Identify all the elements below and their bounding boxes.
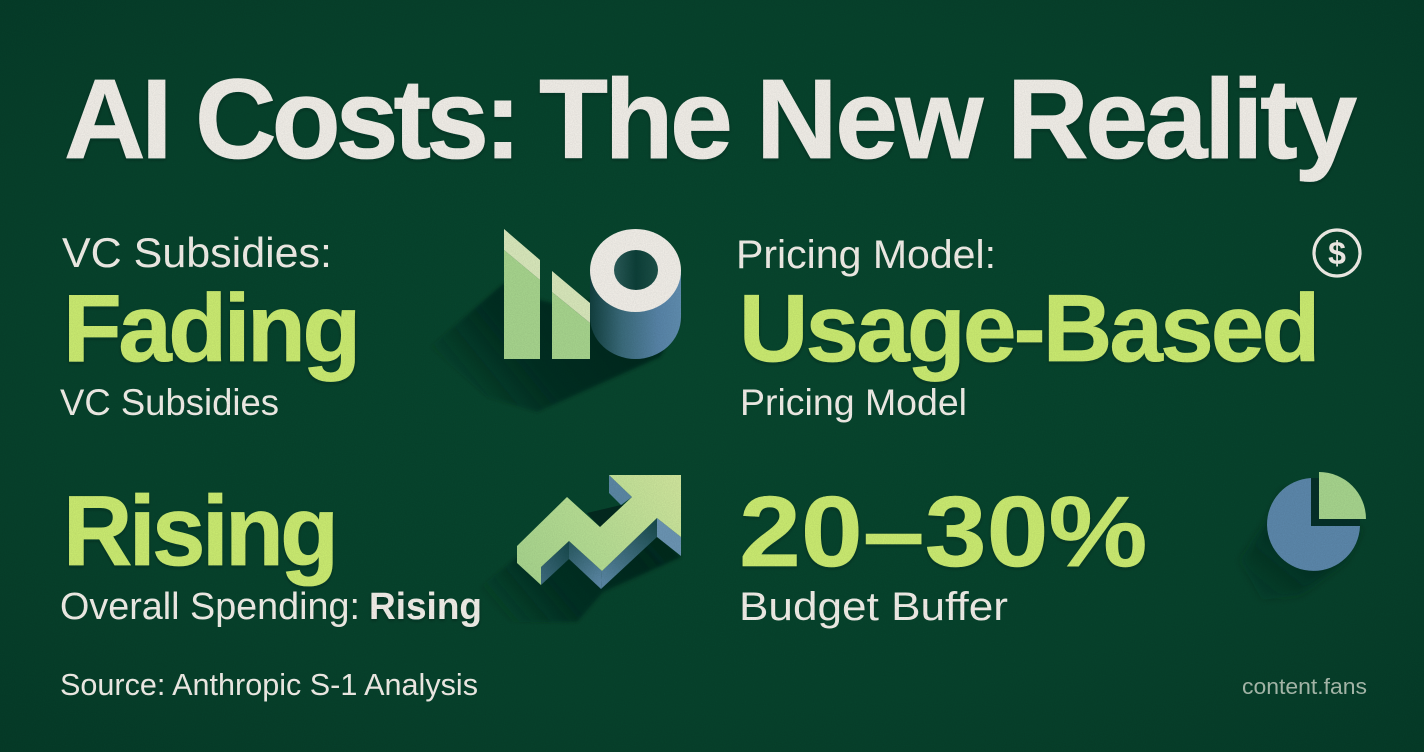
title: AI	[64, 56, 195, 182]
arrow under side right	[601, 518, 657, 589]
arrow under side left	[569, 541, 602, 589]
icon: pie chart	[1240, 472, 1366, 600]
value: Usage-Based: Usage-Based	[739, 275, 1318, 382]
long shadow	[430, 283, 681, 412]
caption: Pricing Model: Pricing Model	[740, 382, 967, 423]
caption: VC Subsidies: VC Subsidies	[60, 382, 279, 423]
source note: Source: Anthropic S-1 Analysis	[60, 667, 478, 702]
long shadow	[473, 530, 681, 622]
icon: dollar coin: $	[1328, 235, 1346, 271]
tall bar	[504, 229, 540, 359]
arrow notch side	[609, 475, 632, 505]
panel: overall spending	[60, 476, 482, 628]
panel: budget buffer	[739, 476, 1147, 629]
label: VC Subsidies heading: VC Subsidies:	[62, 229, 332, 276]
icon: fading bars and cylinder	[430, 229, 681, 412]
icon: dollar coin	[1314, 230, 1360, 276]
caption: Overall Spending: Rising	[369, 586, 482, 628]
arrowhead side	[657, 518, 681, 556]
title: New	[756, 56, 1010, 182]
label: Pricing Model heading: Pricing Model:	[736, 233, 996, 277]
green slice	[1319, 472, 1366, 519]
value: 20–30%: 20–30%	[739, 476, 1147, 588]
value: Rising: Rising	[63, 476, 335, 586]
panel: VC subsidies	[60, 229, 358, 423]
caption: Overall Spending: Overall Spending:	[60, 586, 360, 628]
panel: pricing model	[736, 233, 1318, 423]
slice gap shadow	[1311, 478, 1360, 526]
title: Costs:	[195, 56, 543, 182]
arrow left side	[541, 541, 569, 585]
icon: rising arrow	[473, 475, 681, 622]
short bar	[552, 271, 590, 359]
title: Reality	[1007, 56, 1357, 182]
value: Fading: Fading	[63, 275, 358, 382]
blue slice	[1267, 478, 1360, 571]
arrow top face	[517, 475, 681, 585]
shadow	[1240, 490, 1360, 600]
cylinder	[590, 229, 681, 359]
brand: content.fans: content.fans	[1242, 674, 1367, 699]
title: The	[539, 56, 757, 182]
caption: Budget Buffer: Budget Buffer	[739, 585, 1008, 629]
